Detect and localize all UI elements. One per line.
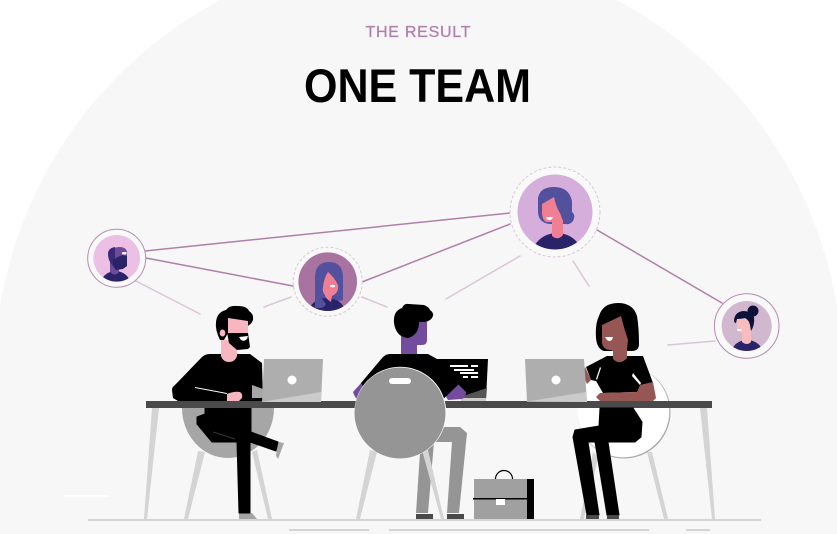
laptop: woman's grey — [525, 359, 587, 402]
person: woman's white chair — [577, 365, 670, 519]
man body — [172, 306, 284, 519]
chair back: round grey — [354, 367, 446, 459]
desk — [146, 401, 712, 408]
person: back view man legs and chair legs — [356, 427, 467, 519]
chair: grey — [182, 408, 274, 519]
network connection lines — [136, 213, 722, 345]
eyebrow heading: THE RESULT — [366, 24, 471, 41]
avatar: bun hair woman — [714, 294, 779, 366]
briefcase — [473, 470, 534, 519]
avatar: long hair woman — [293, 247, 362, 326]
person: bearded man on chair — [172, 306, 284, 519]
title: ONE TEAM — [304, 59, 531, 112]
decorative floor lines — [64, 495, 761, 531]
laptop: man's grey — [262, 359, 323, 402]
avatar: short hair woman — [510, 166, 600, 258]
avatar: bearded man — [87, 228, 146, 288]
person: woman — [573, 303, 656, 519]
desk legs — [144, 408, 715, 519]
laptop: black code screen — [437, 359, 488, 401]
person: back view man torso — [353, 304, 466, 407]
